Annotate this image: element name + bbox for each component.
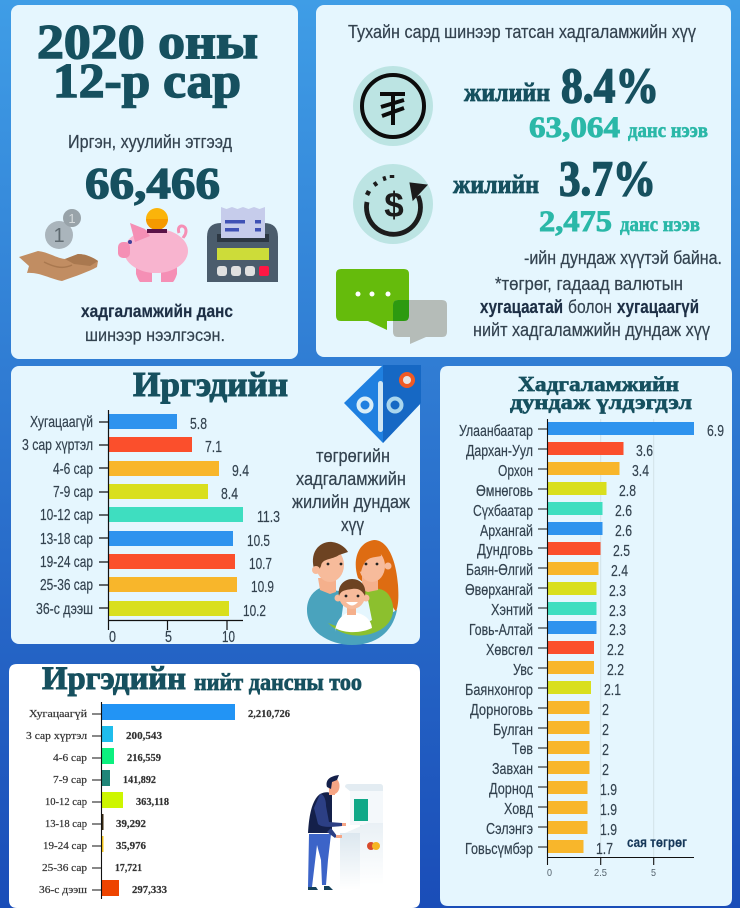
- bar chart: rate by term: 5.8: [190, 416, 207, 433]
- panel: citizens' tugrik rates: [11, 365, 421, 646]
- bar chart: balance by aimag: Дорноговь: [470, 702, 533, 719]
- bar chart: accounts by term: 297,333: [132, 884, 167, 896]
- panel: average savings balance by aimag: [440, 366, 732, 906]
- bar chart: balance by aimag: 1.9: [600, 802, 617, 819]
- panel: citizens' account counts: [9, 661, 420, 908]
- bar chart: balance by aimag: Завхан: [492, 761, 533, 778]
- text: unit label million tugrik: сая төгрөг: [627, 834, 687, 850]
- text: tugrik savings annual average rate: хадгаламжийн: [296, 469, 406, 489]
- bar chart: balance by aimag: 2.5: [613, 543, 630, 560]
- bar chart: accounts by term: 4-6 сар: [53, 752, 88, 764]
- bar chart: rate by term: 13-18 сар: [40, 531, 93, 548]
- bar chart: rate by term: 0: [109, 629, 116, 646]
- icon: hand with coins: [19, 209, 98, 281]
- heading: newly attracted savings rate: Тухайн сард шинээр татсан хадгаламжийн хүү: [348, 22, 696, 42]
- text: tugrik savings annual average rate: жилийн дундаж: [292, 492, 410, 512]
- bar chart: rate by term: 10.9: [251, 579, 274, 596]
- text: footnote: [473, 274, 710, 340]
- stat: foreign currency rate: 3.7%: [559, 150, 656, 206]
- bar chart: accounts by term: [26, 702, 290, 899]
- text: footnote: *төгрөг, гадаад валютын: [495, 274, 683, 294]
- bar chart: accounts by term: 141,892: [123, 774, 156, 786]
- stat: tugrik rate: данс нээв: [628, 118, 708, 142]
- bar chart: accounts by term: Хугацаагүй: [29, 708, 87, 720]
- bar chart: balance by aimag: 0: [547, 867, 552, 879]
- stat: tugrik rate: 63,064: [529, 111, 620, 144]
- heading: average balance: Хадгаламжийн: [518, 372, 679, 396]
- bar chart: balance by aimag: Ховд: [504, 801, 533, 818]
- bar chart: balance by aimag: Увс: [513, 662, 533, 679]
- bar chart: rate by term: 25-36 сар: [40, 577, 93, 594]
- icon: hand with coins: 1: [53, 225, 65, 247]
- bar chart: balance by aimag: Төв: [512, 741, 533, 758]
- bar chart: rate by term: 10.5: [247, 533, 270, 550]
- stat: tugrik rate: [464, 57, 708, 144]
- bar chart: rate by term: 4-6 сар: [53, 461, 93, 478]
- bar chart: balance by aimag: 2.8: [619, 483, 636, 500]
- bar chart: rate by term: 10: [222, 629, 235, 646]
- icon: percent tag: [344, 365, 421, 443]
- bar chart: balance by aimag: Сүхбаатар: [473, 503, 533, 520]
- bar chart: rate by term: Хугацаагүй: [30, 414, 93, 431]
- bar chart: balance by aimag: Дархан-Уул: [466, 443, 533, 460]
- text: footnote: хугацаатай: [480, 297, 563, 317]
- bar chart: balance by aimag: Орхон: [498, 463, 533, 480]
- bar chart: rate by term: 19-24 сар: [40, 554, 93, 571]
- bar chart: accounts by term: 39,292: [116, 818, 146, 830]
- bar chart: balance by aimag: Хэнтий: [491, 602, 533, 619]
- text: average rate sentence: -ийн дундаж хүүтэй байна.: [524, 248, 722, 268]
- bar chart: balance by aimag: 5: [651, 867, 656, 879]
- heading: average balance: [510, 372, 692, 414]
- bar chart: rate by term: 7.1: [205, 439, 222, 456]
- bar chart: balance by aimag: 2.1: [604, 682, 621, 699]
- text: savings accounts opened: хадгаламжийн данс: [81, 301, 233, 321]
- panel: monthly interest rates: [316, 5, 731, 357]
- text: footnote: хугацаагүй: [617, 297, 699, 317]
- text: savings accounts opened: шинээр нээлгэсэн.: [85, 325, 225, 345]
- bar chart: balance by aimag: 2.6: [615, 503, 632, 520]
- bar chart: balance by aimag: 3.4: [632, 463, 649, 480]
- bar chart: balance by aimag: [459, 419, 724, 879]
- bar chart: balance by aimag: 1.7: [596, 841, 613, 858]
- heading: total number of accounts: Иргэдийн: [42, 661, 186, 697]
- heading: citizens: Иргэдийн: [133, 365, 288, 404]
- bar chart: accounts by term: 216,559: [127, 752, 161, 764]
- title: 2020 December: [37, 14, 258, 108]
- title: 2020 December: 2020 оны: [37, 14, 258, 69]
- bar chart: balance by aimag: Дорнод: [489, 781, 533, 798]
- heading: total number of accounts: нийт дансны тоо: [194, 670, 362, 696]
- bar chart: rate by term: 10.2: [243, 603, 266, 620]
- bar chart: accounts by term: 17,721: [115, 862, 142, 874]
- bar chart: balance by aimag: Хөвсгөл: [486, 642, 533, 659]
- text: footnote: нийт хадгаламжийн дундаж хүү: [473, 320, 710, 340]
- bar chart: balance by aimag: 2.3: [609, 583, 626, 600]
- bar chart: balance by aimag: Дундговь: [477, 542, 533, 559]
- bar chart: balance by aimag: 3.6: [636, 443, 653, 460]
- bar chart: accounts by term: 2,210,726: [248, 708, 290, 720]
- bar chart: accounts by term: 363,118: [136, 796, 169, 808]
- icon: cash register: [207, 207, 278, 282]
- stat: tugrik rate: 8.4%: [561, 57, 659, 113]
- bar chart: balance by aimag: 2.2: [607, 642, 624, 659]
- bar chart: balance by aimag: 2.3: [609, 603, 626, 620]
- bar chart: balance by aimag: 2.3: [609, 622, 626, 639]
- heading: total number of accounts: [42, 661, 362, 697]
- text: citizens and legal entities: Иргэн, хуулийн этгээд: [68, 132, 232, 152]
- bar chart: balance by aimag: 6.9: [707, 423, 724, 440]
- bar chart: accounts by term: 25-36 сар: [42, 862, 88, 874]
- icon: piggy bank: [118, 208, 188, 282]
- bar chart: rate by term: 11.3: [257, 509, 280, 526]
- bar chart: accounts by term: 3 сар хүртэл: [26, 730, 88, 742]
- title: 2020 December: 12-р сар: [53, 53, 241, 108]
- bar chart: balance by aimag: 2.4: [611, 563, 628, 580]
- icon: dollar with arrow: [353, 164, 433, 244]
- icon: chat bubbles: [336, 269, 447, 344]
- stat: foreign currency rate: жилийн: [453, 170, 539, 199]
- bar chart: accounts by term: 7-9 сар: [53, 774, 88, 786]
- bar chart: balance by aimag: Говьсүмбэр: [465, 841, 533, 858]
- panel: headline summary: [11, 5, 298, 359]
- icon: person at ATM: [308, 775, 383, 890]
- bar chart: rate by term: 36-с дээш: [36, 601, 93, 618]
- bar chart: balance by aimag: Булган: [493, 722, 533, 739]
- stat: tugrik rate: жилийн: [464, 78, 550, 107]
- bar chart: balance by aimag: Сэлэнгэ: [486, 821, 533, 838]
- bar chart: rate by term: 3 сар хүртэл: [22, 437, 93, 454]
- text: tugrik savings annual average rate: [292, 446, 410, 535]
- stat: foreign currency rate: [453, 150, 700, 238]
- bar chart: accounts by term: 200,543: [126, 730, 163, 742]
- bar chart: rate by term: 7-9 сар: [53, 484, 93, 501]
- bar chart: rate by term: 10-12 сар: [40, 507, 93, 524]
- bar chart: balance by aimag: Баян-Өлгий: [466, 562, 533, 579]
- icon: tugrik coin: [353, 66, 433, 146]
- bar chart: rate by term: 9.4: [232, 463, 249, 480]
- bar chart: balance by aimag: Өвөрхангай: [465, 582, 533, 599]
- bar chart: balance by aimag: Баянхонгор: [465, 682, 533, 699]
- bar chart: accounts by term: 35,976: [116, 840, 146, 852]
- bar chart: accounts by term: 13-18 сар: [45, 818, 87, 830]
- bar chart: balance by aimag: Архангай: [480, 523, 533, 540]
- icon: dollar with arrow: $: [384, 186, 404, 225]
- text: tugrik savings annual average rate: төгрөгийн: [316, 446, 390, 466]
- bar chart: rate by term: 5: [165, 629, 172, 646]
- bar chart: balance by aimag: 2: [602, 702, 609, 719]
- bar chart: accounts by term: 19-24 сар: [43, 840, 88, 852]
- bar chart: balance by aimag: 2: [602, 722, 609, 739]
- bar chart: balance by aimag: 1.9: [600, 822, 617, 839]
- text: footnote: болон: [568, 297, 612, 317]
- bar chart: rate by term: 10.7: [249, 556, 272, 573]
- text: savings accounts opened: [81, 301, 233, 345]
- bar chart: balance by aimag: Улаанбаатар: [459, 423, 533, 440]
- bar chart: balance by aimag: 1.9: [600, 782, 617, 799]
- stat: foreign currency rate: 2,475: [539, 205, 612, 238]
- bar chart: balance by aimag: 2: [602, 742, 609, 759]
- bar chart: rate by term: [22, 410, 280, 646]
- bar chart: accounts by term: 36-с дээш: [39, 884, 88, 896]
- bar chart: balance by aimag: 2.6: [615, 523, 632, 540]
- bar chart: balance by aimag: Өмнөговь: [476, 483, 533, 500]
- bar chart: accounts by term: 10-12 сар: [45, 796, 87, 808]
- text: tugrik savings annual average rate: хүү: [341, 515, 364, 535]
- bar chart: balance by aimag: 2.2: [607, 662, 624, 679]
- heading: average balance: дундаж үлдэгдэл: [510, 390, 692, 414]
- icon: hand with coins: 1: [68, 211, 76, 226]
- number: new accounts: 66,466: [85, 159, 220, 208]
- stat: foreign currency rate: данс нээв: [620, 212, 700, 236]
- bar chart: balance by aimag: Говь-Алтай: [469, 622, 533, 639]
- icon: family: [307, 540, 398, 645]
- bar chart: rate by term: 8.4: [221, 486, 238, 503]
- bar chart: balance by aimag: 2: [602, 762, 609, 779]
- bar chart: balance by aimag: 2.5: [594, 867, 607, 879]
